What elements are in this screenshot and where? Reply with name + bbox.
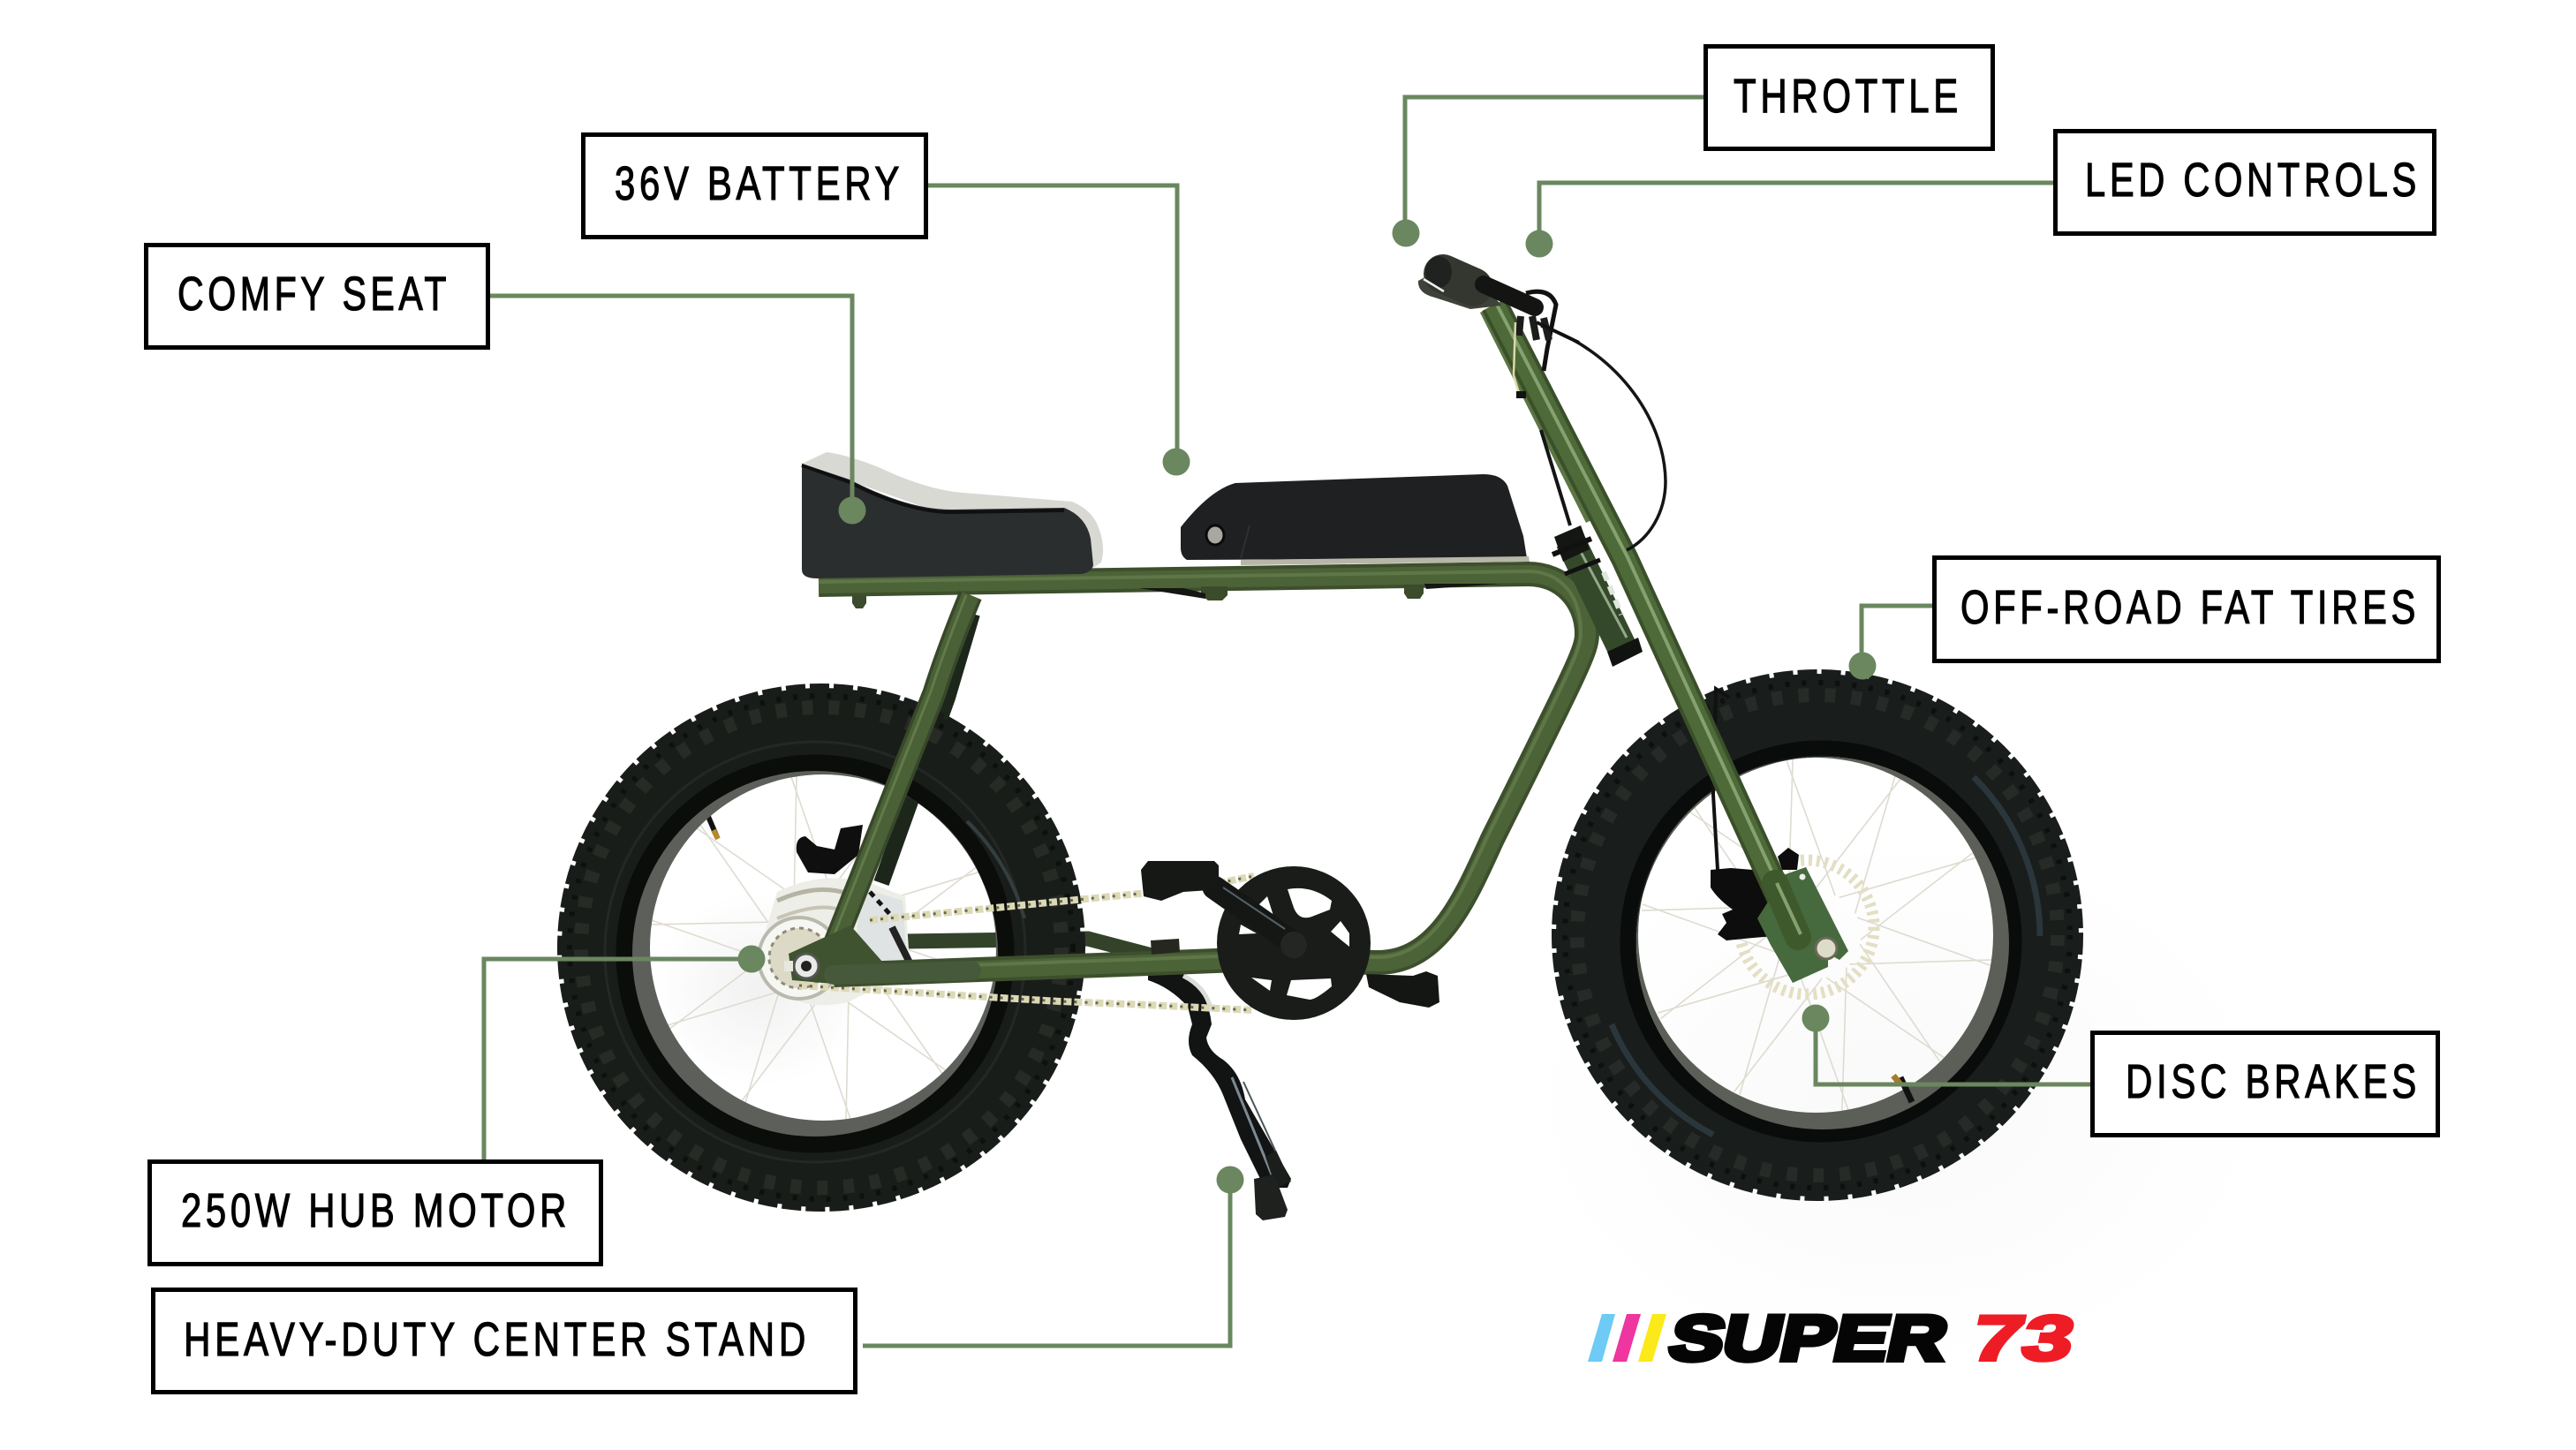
front fat tire bbox=[1555, 673, 2080, 1197]
label: comfy seat: COMFY SEAT bbox=[178, 268, 450, 321]
leader line: disc brakes bbox=[1802, 1005, 2090, 1084]
label: LED controls: LED CONTROLS bbox=[2085, 154, 2421, 207]
pedal right bbox=[1366, 971, 1439, 1008]
label: center stand bbox=[154, 1289, 855, 1392]
label: 36V battery: 36V BATTERY bbox=[615, 157, 903, 210]
label: LED controls bbox=[2056, 131, 2434, 233]
label: comfy seat bbox=[147, 245, 487, 348]
leader line: off-road fat tires bbox=[1849, 606, 1932, 680]
controller cylinder bbox=[1552, 525, 1643, 667]
frame: main tube bbox=[819, 571, 1587, 975]
rear wheel spokes bbox=[646, 774, 997, 1125]
leader line: LED controls bbox=[1526, 183, 2053, 258]
pedal left bbox=[1141, 861, 1219, 901]
chainring and crank bbox=[1214, 866, 1371, 1020]
label: 36V battery bbox=[583, 134, 925, 237]
rear dropout and axle bbox=[784, 925, 971, 984]
brake cable bbox=[1713, 689, 1729, 870]
label: center stand: HEAVY-DUTY CENTER STAND bbox=[184, 1313, 810, 1366]
leader line: throttle bbox=[1392, 97, 1703, 247]
chain bbox=[799, 876, 1254, 1010]
label: off-road fat tires: OFF-ROAD FAT TIRES bbox=[1960, 581, 2420, 634]
frame: seat stay bbox=[822, 595, 971, 958]
label: hub motor: 250W HUB MOTOR bbox=[181, 1184, 570, 1237]
kickstand bbox=[1148, 971, 1291, 1220]
label: off-road fat tires bbox=[1934, 558, 2439, 661]
rear inner stay and lower tube bbox=[881, 614, 1155, 956]
bike photo illustration bbox=[561, 256, 2080, 1220]
front fork bbox=[1484, 305, 1801, 937]
logo: Super 73: 73 bbox=[1966, 1303, 2081, 1374]
front disc rotor bbox=[1740, 860, 1874, 994]
handlebar and throttle grip bbox=[1418, 256, 1579, 398]
label: disc brakes: DISC BRAKES bbox=[2126, 1055, 2421, 1108]
kickstand mount bbox=[1151, 939, 1180, 955]
leader line: 36V battery bbox=[926, 185, 1190, 475]
label: hub motor bbox=[150, 1162, 601, 1265]
leader line: comfy seat bbox=[488, 296, 865, 525]
label: throttle bbox=[1706, 46, 1992, 148]
leader line: center stand bbox=[863, 1166, 1243, 1346]
brake cables bbox=[1541, 326, 1666, 550]
frame: rack tabs bbox=[852, 584, 1501, 608]
logo: Super 73 bbox=[1588, 1303, 2081, 1374]
rear hub motor and brake bbox=[706, 812, 910, 1005]
fork dropout plate bbox=[1757, 867, 1848, 983]
label: throttle: THROTTLE bbox=[1734, 70, 1962, 123]
logo: Super 73: SUPER bbox=[1664, 1303, 1954, 1374]
label: disc brakes bbox=[2093, 1033, 2437, 1136]
leader line: hub motor bbox=[484, 945, 765, 1160]
battery bbox=[1181, 474, 1530, 565]
rear fat tire bbox=[561, 687, 1082, 1208]
front wheel spokes bbox=[1642, 759, 1993, 1111]
seat bbox=[802, 452, 1103, 578]
front brake caliper bbox=[1711, 848, 1799, 940]
